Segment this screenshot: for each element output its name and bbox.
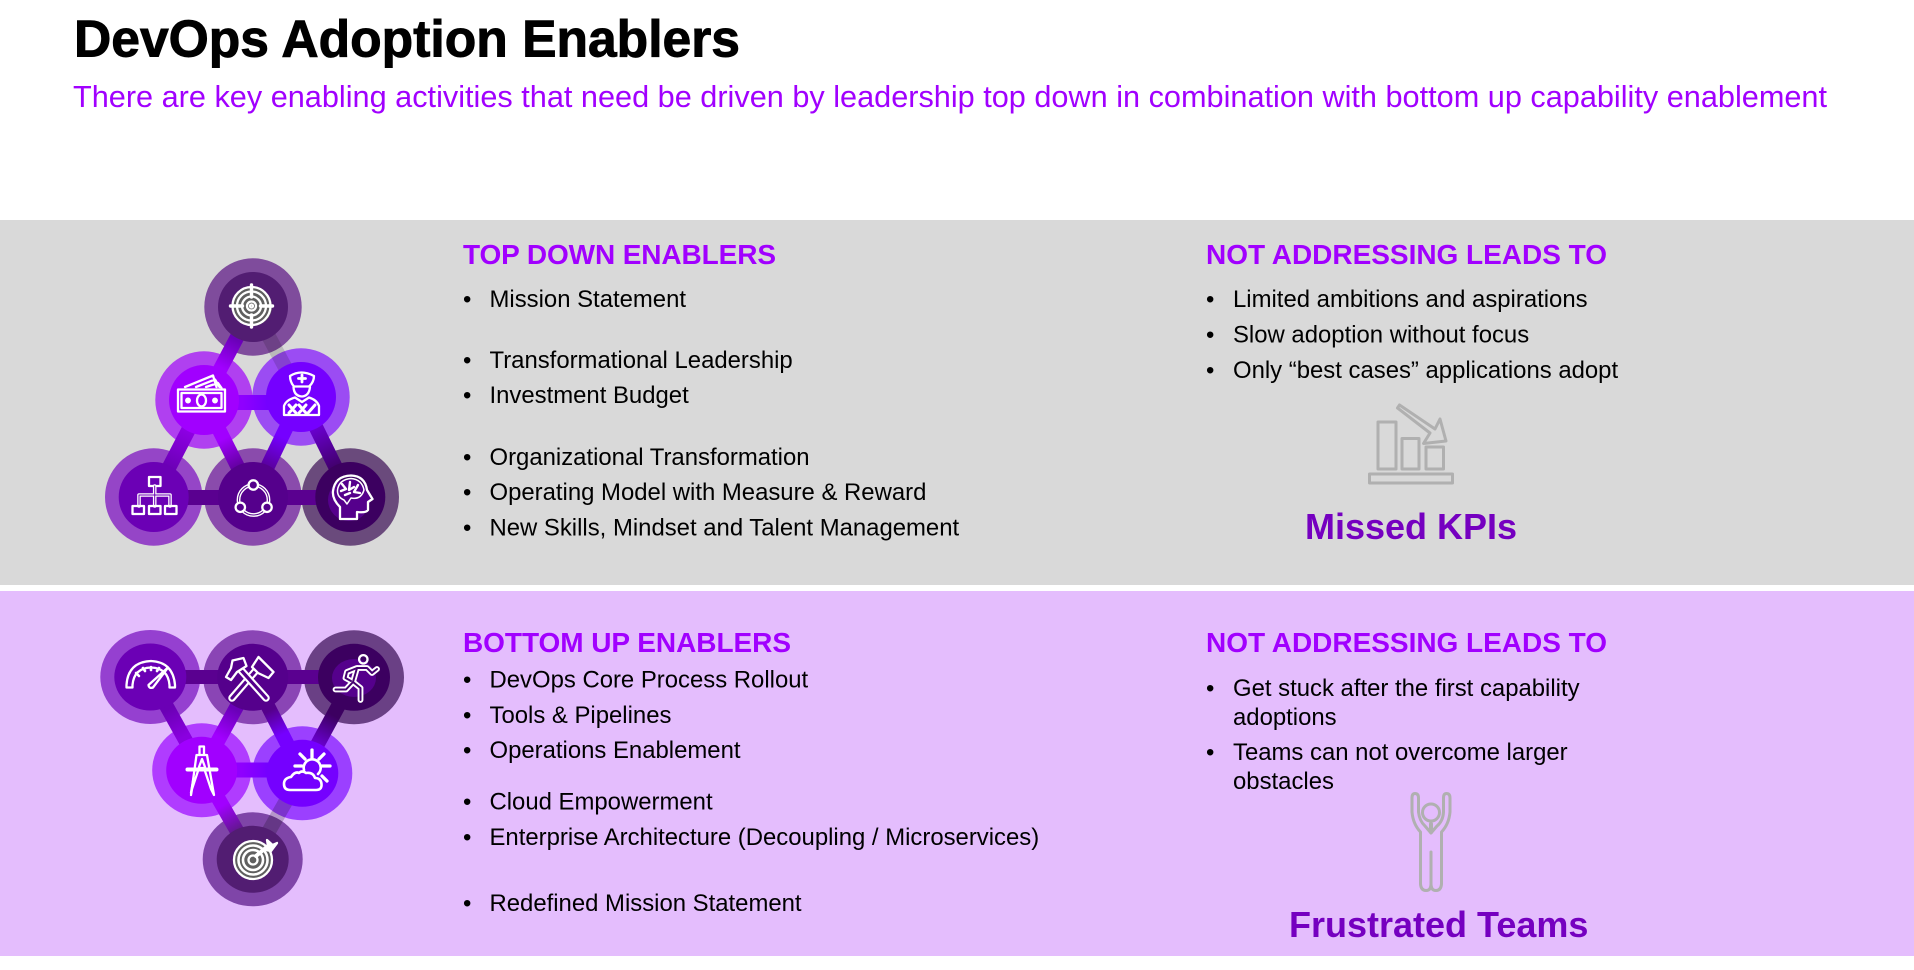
list: top down enablers: Operating Model with Measure & Reward [490, 479, 926, 506]
list: consequences top down: Slow adoption without focus [1233, 322, 1529, 348]
list: top down enablers: • [463, 444, 471, 471]
list: bottom up enablers [463, 666, 1039, 917]
list: bottom up enablers: DevOps Core Process Rollout [490, 666, 809, 694]
list: consequences bottom up: adoptions [1233, 704, 1337, 731]
list: top down enablers: • [463, 479, 471, 506]
list: bottom up enablers: Tools & Pipelines [490, 702, 671, 729]
list: consequences top down [1206, 286, 1618, 384]
list: bottom up enablers: • [463, 737, 471, 764]
icon: head with brain [328, 476, 372, 521]
list: bottom up enablers: • [463, 666, 471, 694]
list: consequences bottom up: Get stuck after the first capability [1233, 675, 1580, 702]
diagram: top down hexagon network [105, 258, 399, 546]
list: consequences top down: Only “best cases” applications adopt [1233, 357, 1618, 384]
icon: money banknotes [178, 376, 225, 412]
list: bottom up enablers: Cloud Empowerment [490, 788, 713, 816]
icon: cycle [236, 480, 272, 515]
icon: speedometer [126, 661, 175, 688]
icon: org chart [132, 477, 176, 514]
list: consequences top down: • [1206, 357, 1214, 384]
icon: declining bar chart [1370, 405, 1452, 483]
list: consequences bottom up: obstacles [1233, 768, 1334, 795]
icon: running person [332, 655, 377, 700]
heading: not addressing leads to: NOT ADDRESSING LEADS TO [1206, 627, 1607, 658]
list: top down enablers: New Skills, Mindset and Talent Management [490, 514, 960, 542]
list: consequences top down: Limited ambitions and aspirations [1233, 286, 1588, 313]
list: bottom up enablers: Redefined Mission Statement [490, 890, 802, 917]
list: consequences bottom up: • [1206, 739, 1214, 766]
list: bottom up enablers: Operations Enablement [490, 737, 741, 764]
list: top down enablers: Transformational Leadership [490, 347, 793, 374]
list: top down enablers: Organizational Transformation [490, 444, 810, 471]
list: top down enablers: Investment Budget [490, 382, 689, 409]
list: top down enablers: • [463, 286, 471, 313]
icon: drafting compass [188, 746, 216, 795]
list: consequences top down: • [1206, 322, 1214, 348]
list: consequences bottom up [1206, 675, 1580, 795]
icon: officer [284, 372, 319, 415]
icon: bullseye with arrow [233, 840, 277, 880]
subtitle: There are key enabling activities that need be driven by leadership top down in combination with bottom up capability enablement [73, 80, 1828, 114]
heading: top down enablers: TOP DOWN ENABLERS [463, 239, 776, 270]
icon: frustrated person [1412, 794, 1450, 890]
list: top down enablers [463, 286, 960, 542]
list: top down enablers: • [463, 514, 471, 542]
diagram: bottom up hexagon network [100, 630, 404, 906]
list: bottom up enablers: • [463, 702, 471, 729]
heading: bottom up enablers: BOTTOM UP ENABLERS [463, 627, 791, 658]
list: consequences top down: • [1206, 286, 1214, 313]
heading: not addressing leads to: NOT ADDRESSING LEADS TO [1206, 239, 1607, 270]
list: bottom up enablers: Enterprise Architecture (Decoupling / Microservices) [490, 824, 1039, 851]
callout: missed kpis: Missed KPIs [1305, 506, 1517, 547]
list: consequences bottom up: Teams can not overcome larger [1233, 739, 1568, 766]
list: bottom up enablers: • [463, 788, 471, 816]
icon: sun and cloud [284, 750, 330, 790]
list: top down enablers: • [463, 382, 471, 409]
icon: crosshair target [230, 285, 272, 327]
panel: top down [0, 220, 1914, 585]
list: top down enablers: Mission Statement [490, 286, 686, 313]
title: DevOps Adoption Enablers [74, 10, 740, 68]
list: bottom up enablers: • [463, 824, 471, 851]
icon: crossed hammers [226, 657, 274, 698]
list: consequences bottom up: • [1206, 675, 1214, 702]
list: bottom up enablers: • [463, 890, 471, 917]
callout: frustrated teams: Frustrated Teams [1289, 904, 1588, 945]
panel: bottom up [0, 591, 1914, 956]
list: top down enablers: • [463, 347, 471, 374]
